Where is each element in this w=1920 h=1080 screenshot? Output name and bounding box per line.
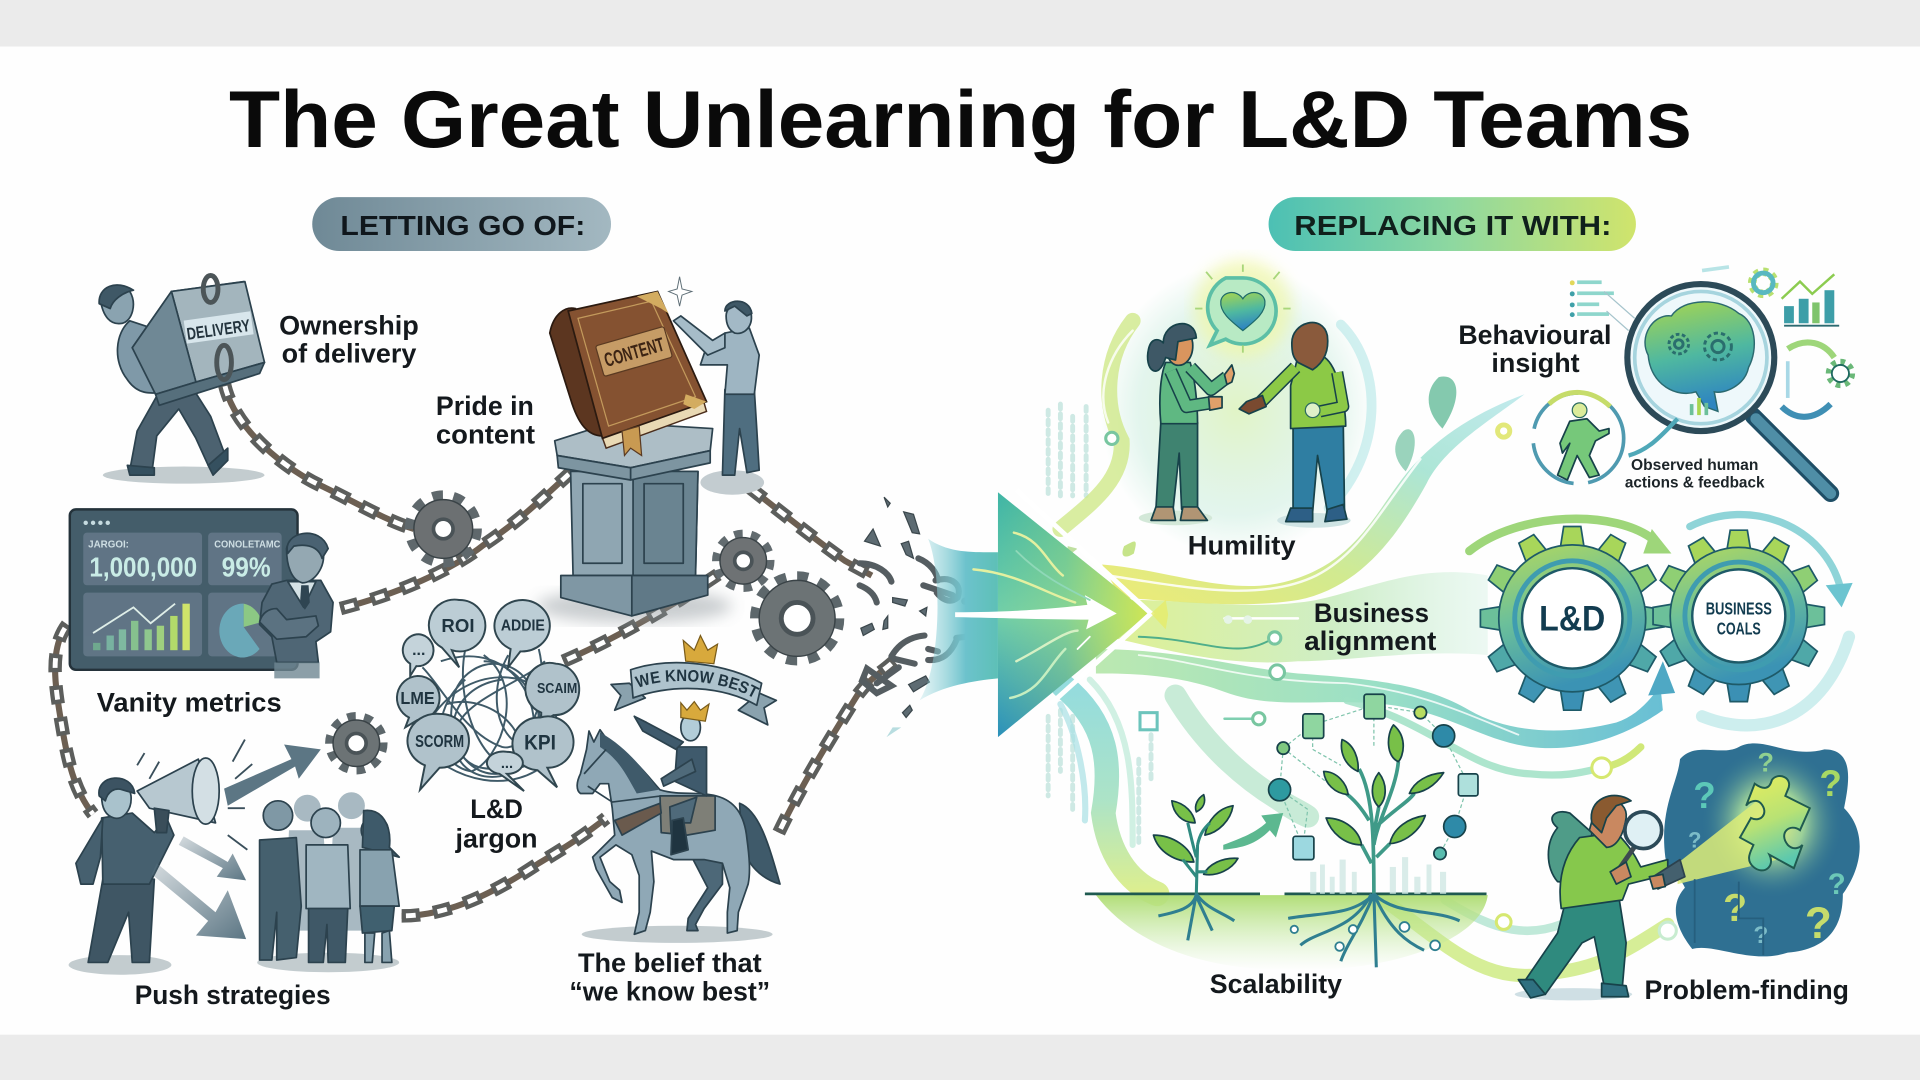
label: humility: Humility (1188, 531, 1296, 561)
label: the belief that we know best: “we know best” (569, 976, 770, 1006)
icon: book on pedestal with admirer (536, 277, 764, 623)
label: the belief that we know best (569, 948, 770, 1006)
icon: L&D gear: L&D (1539, 599, 1605, 639)
label: vanity metrics: Vanity metrics (97, 687, 282, 717)
title: The Great Unlearning for L&D Teams (229, 75, 1692, 165)
panel: replacing it with (860, 260, 1860, 1005)
icon: insight surroundings (1533, 267, 1851, 484)
broken chain links and shards (860, 497, 987, 737)
icon: jargon speech bubbles and tangle: ROI (441, 615, 474, 636)
icon: business goals gear: BUSINESS (1706, 599, 1772, 619)
label: ownership of delivery: Ownership (279, 310, 419, 340)
icon: jargon speech bubbles and tangle: LME (400, 688, 435, 708)
icon: explorer finding puzzle piece (1515, 743, 1860, 1000)
icon: book on pedestal with admirer: CONTENT (602, 334, 667, 372)
icon: business goals gear (1653, 530, 1824, 702)
label: behavioural insight: insight (1491, 348, 1580, 378)
icon: dashboard with proud manager: 1,000,000 (89, 552, 197, 583)
icon: man carrying delivery box (99, 276, 264, 484)
icon: explorer finding puzzle piece: ? (1693, 775, 1716, 816)
label: the belief that we know best: The belief that (578, 948, 762, 978)
icon: dashboard with proud manager (70, 509, 333, 678)
label: business alignment: alignment (1304, 626, 1436, 656)
label: scalability: Scalability (1210, 969, 1342, 999)
heading pill: letting go of: LETTING GO OF: (340, 210, 585, 241)
icon: explorer finding puzzle piece: ? (1805, 899, 1832, 948)
icon: explorer finding puzzle piece: ? (1723, 887, 1747, 930)
icon: L&D gear (1480, 527, 1664, 710)
label: L&D jargon: L&D (470, 794, 523, 824)
central transition arrow (920, 490, 1168, 737)
icon: explorer finding puzzle piece: ? (1753, 922, 1768, 949)
icon: two people with heart bubble (1139, 260, 1351, 528)
icon: jargon speech bubbles and tangle: ADDIE (501, 618, 545, 635)
icon: explorer finding puzzle piece: ? (1757, 747, 1774, 777)
icon: business goals gear: COALS (1717, 618, 1761, 638)
heading pill: replacing it with: REPLACING IT WITH: (1294, 210, 1611, 241)
heading pill: letting go of (312, 197, 611, 251)
label: L&D jargon (455, 794, 538, 853)
caption: observed human actions (1625, 457, 1765, 491)
icon: jargon speech bubbles and tangle: SCORM (415, 731, 464, 751)
label: pride in content: Pride in (436, 391, 534, 421)
icon: explorer finding puzzle piece: ? (1688, 827, 1701, 852)
label: L&D jargon: jargon (455, 823, 538, 853)
label: push strategies: Push strategies (135, 980, 331, 1010)
label: ownership of delivery (279, 310, 419, 368)
icon: man carrying delivery box: DELIVERY (185, 315, 252, 344)
icon: jargon speech bubbles and tangle: SCAIM (537, 681, 577, 697)
icon: explorer finding puzzle piece: ? (1819, 763, 1842, 804)
icon: explorer finding puzzle piece: ? (1828, 868, 1846, 901)
icon: sapling and networked tree (1085, 694, 1488, 970)
icon: jargon speech bubbles and tangle: ... (501, 756, 513, 772)
icon: magnifying glass over brain (1627, 284, 1831, 493)
icon: dashboard with proud manager: CONOLETAMC (214, 539, 280, 550)
heading pill: replacing it with (1269, 197, 1636, 251)
caption: observed human actions: actions & feedback (1625, 474, 1765, 491)
icon: man shouting through megaphone (69, 740, 252, 975)
icon: jargon speech bubbles and tangle: KPI (524, 731, 556, 754)
panel: letting go of (48, 273, 898, 1010)
icon: rider on horse with banner: WE KNOW BEST (634, 670, 760, 697)
icon: rusty gears (329, 496, 839, 770)
chains linking the old habits (55, 382, 894, 916)
icon: rider on horse with banner (576, 634, 781, 943)
icon: dashboard with proud manager: 99% (222, 552, 271, 583)
icon: jargon speech bubbles and tangle (397, 600, 579, 791)
icon: dashboard with proud manager: JARGOI: (88, 539, 129, 550)
icon: crowd of people (257, 792, 399, 972)
icon: jargon speech bubbles and tangle: ... (412, 642, 425, 659)
label: problem-finding: Problem-finding (1644, 975, 1849, 1005)
arrows: pushing outwards (152, 744, 321, 939)
caption: observed human actions: Observed human (1631, 457, 1758, 474)
label: business alignment (1304, 598, 1436, 656)
label: business alignment: Business (1314, 598, 1429, 628)
label: behavioural insight (1458, 320, 1611, 378)
label: behavioural insight: Behavioural (1458, 320, 1611, 350)
label: pride in content (436, 391, 535, 449)
label: pride in content: content (436, 419, 535, 449)
label: ownership of delivery: of delivery (282, 338, 416, 368)
flowing streams from arrow (1048, 263, 1853, 976)
